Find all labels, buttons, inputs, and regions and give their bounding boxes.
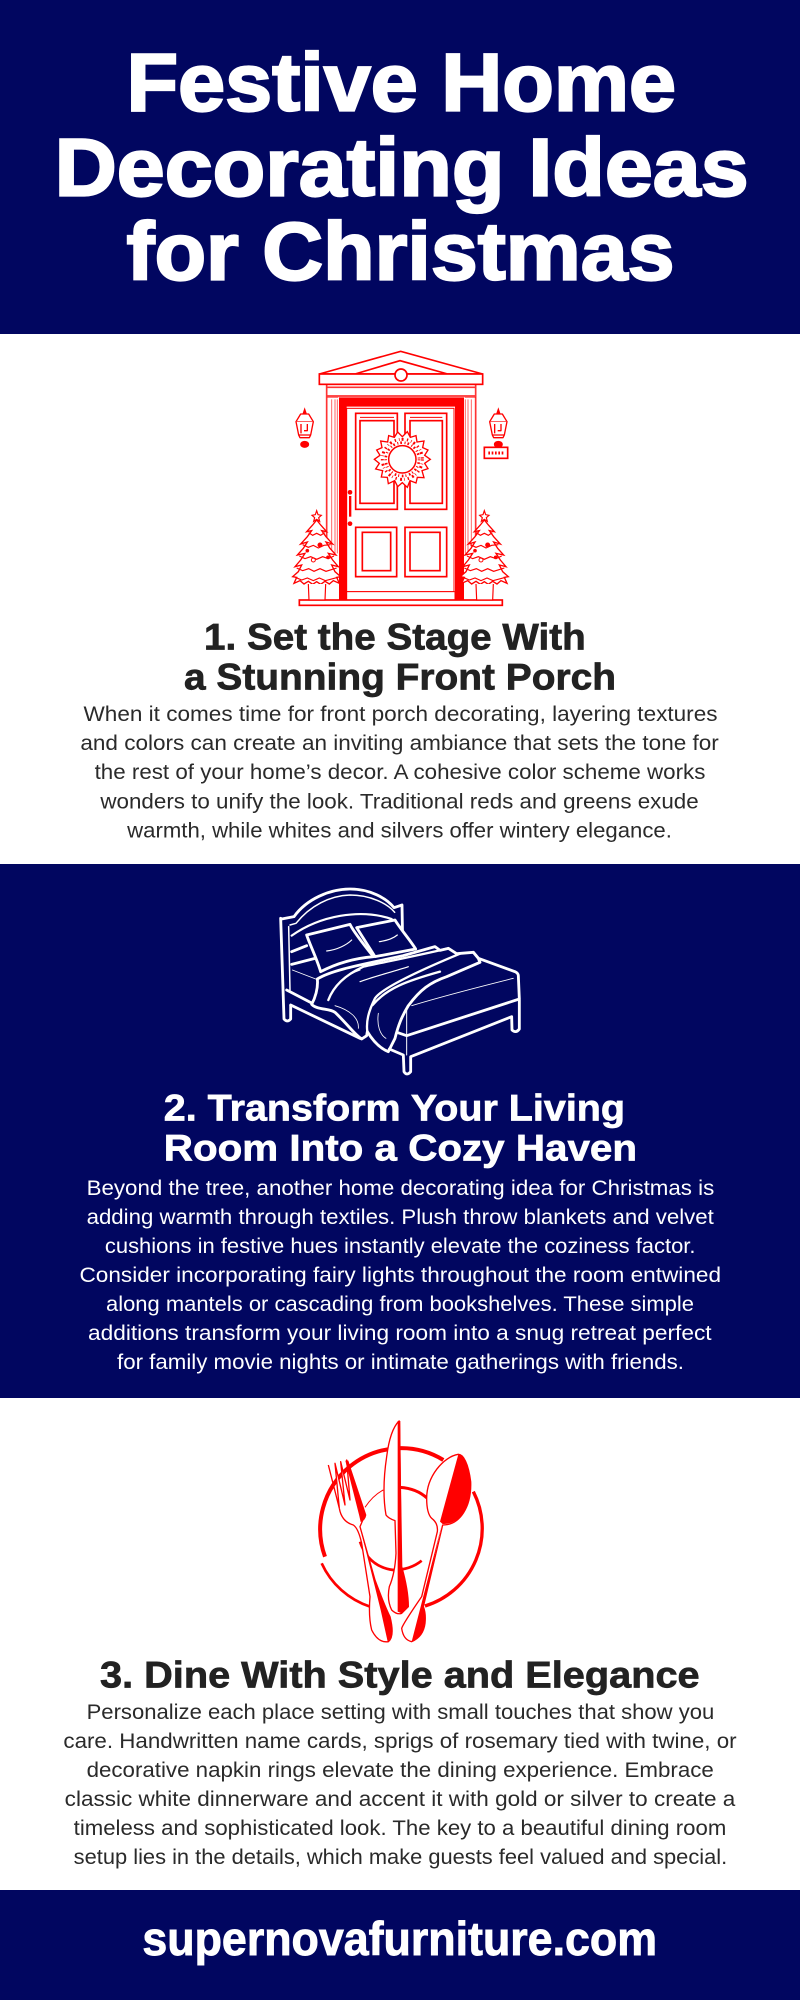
footer website: supernovafurniture.com <box>142 1912 657 1965</box>
mattress <box>395 952 519 1036</box>
text: section 2 body: adding warmth through textiles. Plush throw blankets and velvet <box>87 1205 714 1229</box>
text: section 2 body: for family movie nights or intimate gatherings with friends. <box>117 1350 684 1374</box>
text: section 2 body <box>80 1176 721 1374</box>
text: section 2 body: along mantels or cascading from bookshelves. These simple <box>106 1292 694 1316</box>
heading: section 2: Room Into a Cozy Haven <box>164 1128 637 1169</box>
title: Festive Home <box>126 38 676 129</box>
text: section 3 body: timeless and sophisticated look. The key to a beautiful dining room <box>74 1816 726 1840</box>
text: section 1 body: the rest of your home’s decor. A cohesive color scheme works <box>95 760 705 784</box>
text: section 1 body: warmth, while whites and silvers offer wintery elegance. <box>126 818 672 842</box>
text: section 3 body: Personalize each place setting with small touches that show you <box>87 1700 714 1724</box>
heading: section 1: a Stunning Front Porch <box>184 656 616 697</box>
panel: front porch <box>0 334 800 864</box>
text: section 1 body: wonders to unify the look. Traditional reds and greens exude <box>99 789 699 813</box>
icon: plate and cutlery <box>320 1421 482 1642</box>
blanket <box>312 947 480 1052</box>
door handle <box>348 490 352 526</box>
text: section 1 body: When it comes time for front porch decorating, layering textures <box>84 702 718 726</box>
title <box>55 38 749 297</box>
plate <box>320 1448 482 1607</box>
title: Decorating Ideas <box>55 123 749 214</box>
heading: section 2: 2. Transform Your Living <box>164 1088 625 1129</box>
panel: footer <box>0 1890 800 2000</box>
text: section 1 body: and colors can create an inviting ambiance that sets the tone for <box>80 731 719 755</box>
text: section 2 body: cushions in festive hues instantly elevate the coziness factor. <box>105 1234 695 1258</box>
title: for Christmas <box>126 206 674 297</box>
text: section 3 body: decorative napkin rings elevate the dining experience. Embrace <box>87 1758 714 1782</box>
spoon <box>402 1454 471 1642</box>
text: section 2 body: Beyond the tree, another home decorating idea for Christmas is <box>87 1176 714 1200</box>
heading: section 3: 3. Dine With Style and Elegance <box>100 1654 700 1695</box>
text: section 2 body: Consider incorporating fairy lights throughout the room entwined <box>80 1263 721 1287</box>
fork <box>328 1460 392 1642</box>
text: section 1 body <box>80 702 719 842</box>
wreath <box>374 432 430 487</box>
panel: header <box>0 0 800 334</box>
knife <box>384 1421 408 1614</box>
text: section 3 body <box>63 1700 737 1869</box>
panel: living room <box>0 864 800 1398</box>
text: section 3 body: care. Handwritten name cards, sprigs of rosemary tied with twine, or <box>63 1729 737 1753</box>
heading: section 1: 1. Set the Stage With <box>204 616 586 657</box>
heading: section 2 <box>164 1088 637 1169</box>
icon: decorated front door <box>293 351 508 605</box>
text: section 2 body: additions transform your living room into a snug retreat perfect <box>88 1321 712 1345</box>
text: section 3 body: setup lies in the details, which make guests feel valued and special. <box>74 1845 727 1869</box>
icon: bed <box>281 889 519 1074</box>
text: section 3 body: classic white dinnerware and accent it with gold or silver to create a <box>65 1787 735 1811</box>
panel: dining <box>0 1398 800 1890</box>
heading: section 1 <box>184 616 616 697</box>
